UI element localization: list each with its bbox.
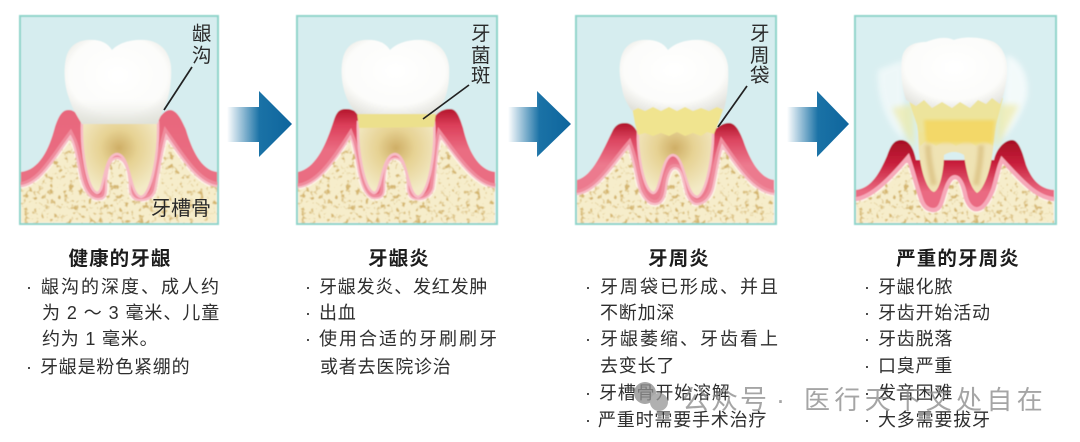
text: periodontitis: 严重时需要手术治疗 bbox=[598, 410, 767, 430]
label: periodontal pocket: 袋 bbox=[750, 65, 770, 87]
text: periodontitis: 不断加深 bbox=[600, 303, 675, 323]
text: gingivitis: 牙龈炎 bbox=[368, 248, 430, 270]
text: periodontitis: 牙周炎 bbox=[648, 248, 710, 270]
text: healthy gums: 牙龈是粉色紧绷的 bbox=[40, 357, 190, 377]
arrow 3 bbox=[787, 91, 849, 157]
text: severe periodontitis: · bbox=[864, 383, 871, 403]
label: gingival sulcus: 龈 bbox=[192, 23, 212, 45]
text: severe periodontitis: 牙龈化脓 bbox=[878, 277, 953, 297]
label: plaque: 斑 bbox=[471, 65, 491, 87]
label: periodontal pocket: 周 bbox=[750, 45, 770, 67]
label: plaque: 牙 bbox=[471, 23, 491, 45]
text: severe periodontitis: · bbox=[864, 277, 871, 297]
text: gingivitis bbox=[305, 248, 499, 377]
text: severe periodontitis: 口臭严重 bbox=[878, 356, 953, 376]
text: severe periodontitis: · bbox=[864, 303, 871, 323]
text: periodontitis: · bbox=[585, 410, 592, 430]
text: healthy gums: · bbox=[26, 357, 33, 377]
text: severe periodontitis: · bbox=[864, 356, 871, 376]
label: periodontal pocket bbox=[718, 23, 770, 127]
text: severe periodontitis: 牙齿开始活动 bbox=[878, 303, 991, 323]
text: healthy gums: 约为 1 毫米。 bbox=[42, 329, 158, 349]
text: gingivitis: 牙龈发炎、发红发肿 bbox=[319, 277, 488, 297]
text: periodontitis: · bbox=[585, 383, 592, 403]
label: plaque: 菌 bbox=[471, 45, 491, 67]
text: gingivitis: 使用合适的牙刷刷牙 bbox=[319, 329, 499, 349]
watermark: 医行天下文处自在 bbox=[804, 385, 1047, 415]
text: gingivitis: · bbox=[305, 303, 312, 323]
text: periodontitis bbox=[585, 248, 780, 430]
label: gingival sulcus bbox=[164, 23, 212, 110]
watermark: 公众号 bbox=[682, 385, 769, 415]
text: periodontitis: · bbox=[585, 277, 592, 297]
text: severe periodontitis: · bbox=[864, 329, 871, 349]
panel: gingivitis bbox=[297, 16, 497, 224]
panel: healthy gums bbox=[20, 16, 218, 224]
text: healthy gums bbox=[26, 247, 221, 377]
panel: periodontitis bbox=[576, 16, 776, 224]
label: plaque bbox=[423, 23, 491, 119]
text: severe periodontitis: 大多需要拔牙 bbox=[878, 410, 991, 430]
text: periodontitis: 牙龈萎缩、牙齿看上 bbox=[600, 329, 780, 349]
label: periodontal pocket: 牙 bbox=[750, 23, 770, 45]
arrow 2 bbox=[508, 91, 571, 157]
panel: severe periodontitis bbox=[855, 16, 1056, 224]
watermark bbox=[634, 382, 1047, 415]
text: healthy gums: · bbox=[26, 277, 33, 297]
text: severe periodontitis bbox=[864, 248, 1020, 430]
text: periodontitis: 牙周袋已形成、并且 bbox=[600, 277, 780, 297]
text: periodontitis: · bbox=[585, 329, 592, 349]
text: periodontitis: 牙槽骨开始溶解 bbox=[599, 383, 731, 403]
text: healthy gums: 龈沟的深度、成人约 bbox=[41, 277, 221, 297]
text: gingivitis: · bbox=[305, 329, 312, 349]
text: gingivitis: 或者去医院诊治 bbox=[320, 357, 452, 377]
text: periodontitis: 去变长了 bbox=[600, 356, 675, 376]
text: gingivitis: · bbox=[305, 277, 312, 297]
text: healthy gums: 健康的牙龈 bbox=[68, 247, 172, 270]
label: alveolar bone: 牙槽骨 bbox=[151, 197, 211, 220]
text: severe periodontitis: 牙齿脱落 bbox=[878, 329, 953, 349]
text: severe periodontitis: · bbox=[864, 410, 871, 430]
watermark: · bbox=[776, 385, 785, 415]
text: severe periodontitis: 严重的牙周炎 bbox=[896, 248, 1020, 270]
text: severe periodontitis: 发音困难 bbox=[878, 383, 953, 403]
text: gingivitis: 出血 bbox=[319, 303, 357, 323]
text: healthy gums: 为 2 ～ 3 毫米、儿童 bbox=[42, 303, 220, 323]
arrow 1 bbox=[227, 91, 292, 157]
label: gingival sulcus: 沟 bbox=[192, 45, 212, 67]
